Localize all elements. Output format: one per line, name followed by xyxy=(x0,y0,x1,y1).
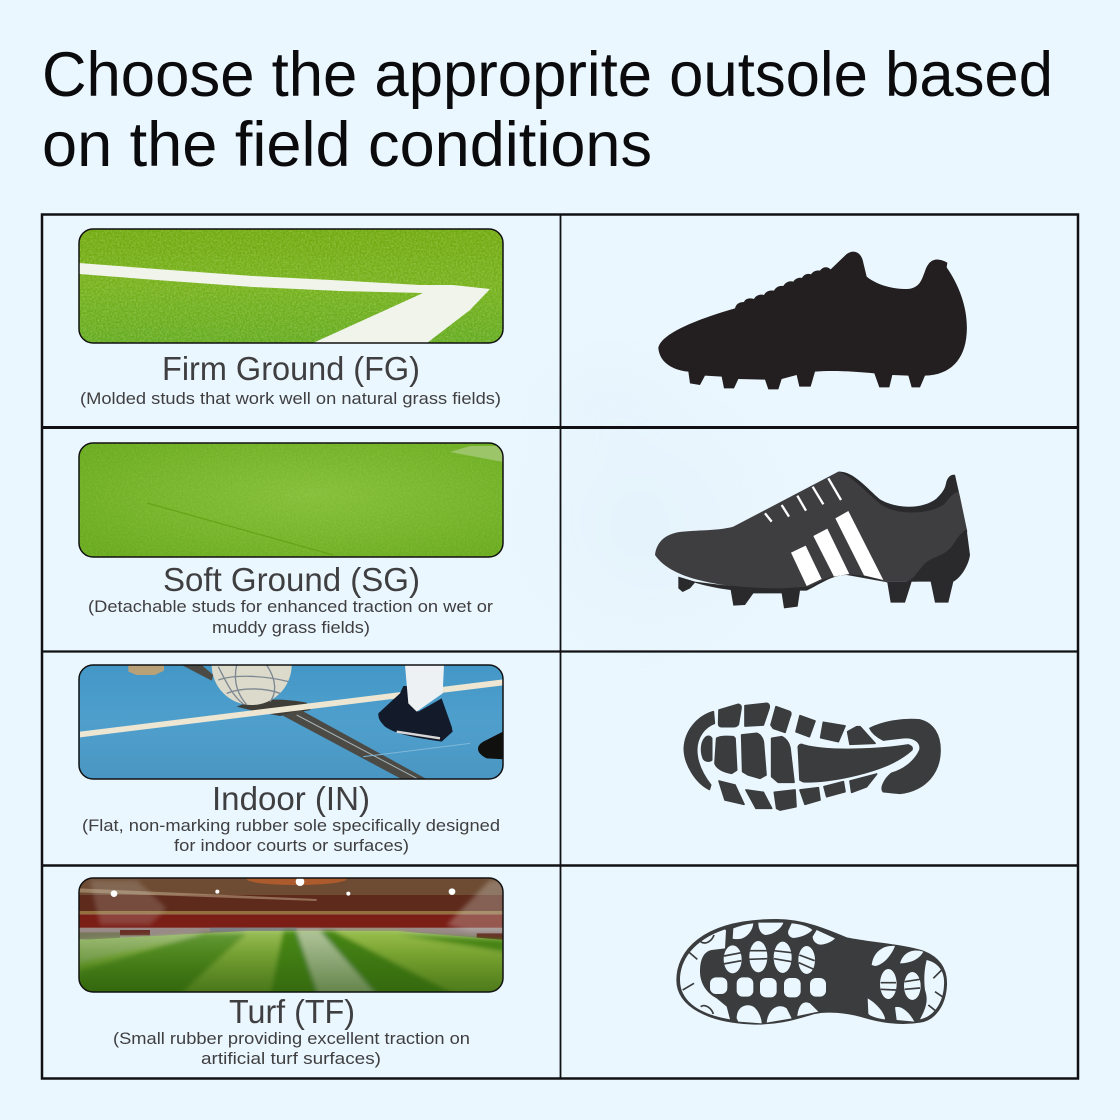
description: turf xyxy=(113,1030,470,1068)
title xyxy=(42,40,1053,180)
photo: green grass pitch xyxy=(79,443,503,557)
panel: turf xyxy=(78,873,946,1068)
heading: soft ground: Soft Ground (SG) xyxy=(163,561,420,598)
heading: indoor: Indoor (IN) xyxy=(212,780,370,817)
description: soft ground xyxy=(88,598,494,637)
description: firm ground: (Molded studs that work well on natural grass fields) xyxy=(80,390,501,408)
photo: floodlit stadium turf xyxy=(78,873,505,995)
description: soft ground: (Detachable studs for enhanced traction on wet or xyxy=(88,598,494,616)
title: Choose the approprite outsole based xyxy=(42,40,1053,110)
description: indoor xyxy=(82,817,500,855)
panel: soft ground xyxy=(79,443,970,637)
icon: turf outsole xyxy=(677,920,946,1024)
panel: indoor xyxy=(78,664,941,854)
icon: striped detachable stud boot xyxy=(655,472,970,608)
description: turf: artificial turf surfaces) xyxy=(201,1050,381,1068)
description: indoor: for indoor courts or surfaces) xyxy=(174,837,409,855)
description: indoor: (Flat, non-marking rubber sole specifically designed xyxy=(82,817,500,835)
icon: molded stud boot silhouette xyxy=(658,252,967,389)
heading: firm ground: Firm Ground (FG) xyxy=(162,350,420,387)
heading: turf: Turf (TF) xyxy=(229,993,355,1030)
panel: firm ground xyxy=(79,229,967,408)
description: soft ground: muddy grass fields) xyxy=(212,619,370,637)
comparison table grid xyxy=(42,214,1078,1079)
photo: indoor court with ball and player's feet xyxy=(78,664,504,780)
photo: grass field with white lines xyxy=(79,229,503,343)
title: on the field conditions xyxy=(42,110,652,180)
icon: indoor flat outsole xyxy=(684,703,940,810)
description: turf: (Small rubber providing excellent traction on xyxy=(113,1030,470,1048)
